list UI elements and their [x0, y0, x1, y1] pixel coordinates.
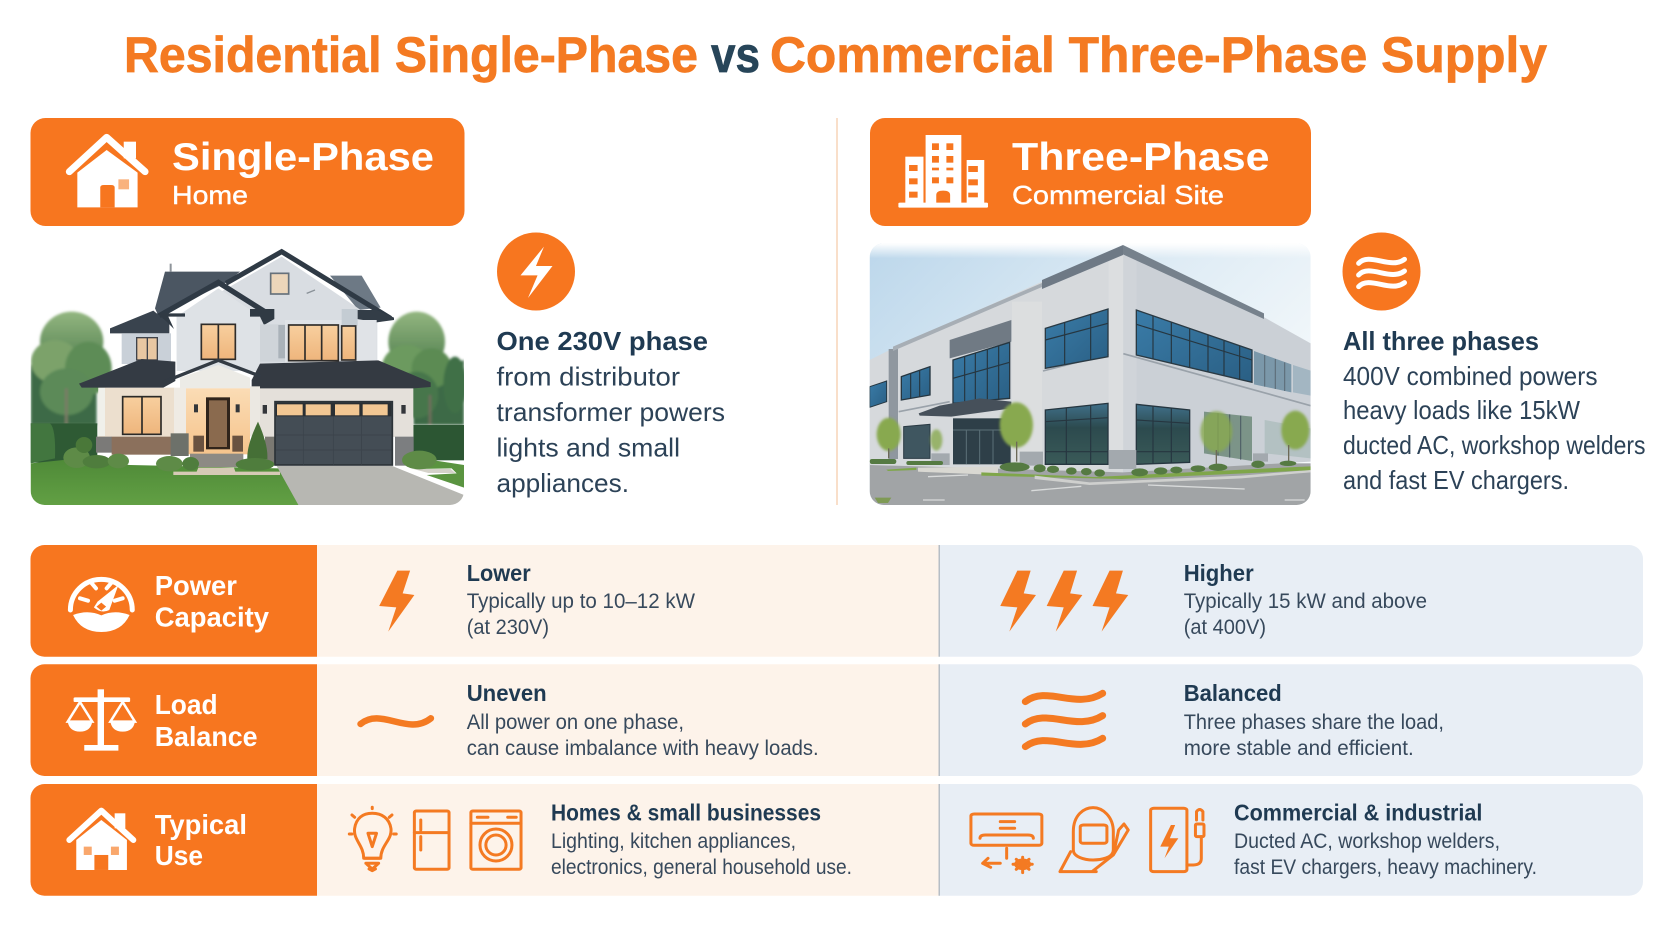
steps [190, 454, 243, 467]
icon: three waves [1025, 693, 1103, 747]
text: single-phase description [496, 326, 725, 498]
middle wall with bay [260, 324, 286, 362]
row: load balance: All power on one phase, [467, 711, 684, 734]
row: typical use: Homes & small businesses [551, 800, 821, 826]
upper windows right [1136, 310, 1252, 382]
row: typical use: Ducted AC, workshop welders, [1234, 830, 1500, 853]
upper windows left [1045, 309, 1108, 368]
text: three-phase description: 400V combined powers [1343, 361, 1598, 391]
title: Commercial Three-Phase Supply [770, 27, 1547, 83]
icon: house small [69, 811, 133, 870]
text: three-phase description: All three phases [1343, 326, 1539, 356]
row: typical use: electronics, general household use. [551, 856, 852, 879]
text: single-phase description: lights and small [496, 432, 680, 462]
row: load balance: Uneven [467, 680, 547, 706]
upper windows [201, 324, 235, 359]
side roof and wall [110, 311, 169, 333]
lower roofs [79, 359, 175, 388]
left facade [870, 247, 1123, 472]
row: typical use: fast EV chargers, heavy machinery. [1234, 856, 1537, 879]
title: vs [711, 27, 760, 83]
garage [275, 402, 392, 465]
row: power capacity: Power [155, 570, 237, 601]
text: single-phase description: appliances. [496, 468, 629, 498]
icon: office building [898, 135, 988, 208]
row: typical use: Use [155, 840, 203, 871]
background trees [31, 312, 467, 425]
icon: three bolts [1000, 571, 1128, 632]
row: load balance: Balanced [1184, 680, 1282, 706]
row: load balance [30, 664, 1643, 776]
floor bands [899, 354, 1311, 412]
row: typical use [30, 784, 1643, 896]
row: power capacity: Typically 15 kW and above [1184, 590, 1427, 613]
lower windows [1045, 403, 1108, 464]
porch [180, 365, 250, 388]
icon: lightning circle [497, 232, 575, 310]
row: power capacity: Higher [1184, 560, 1254, 586]
lower walls [98, 388, 174, 438]
top window [271, 273, 289, 294]
parapet [1123, 245, 1264, 319]
icon: single wave [361, 718, 431, 724]
asphalt [870, 463, 1311, 507]
panel: three-phase header: Commercial Site [1012, 180, 1224, 210]
text: single-phase description: from distributor [496, 362, 680, 392]
stone base [96, 437, 112, 453]
top gable trim [226, 252, 391, 318]
text: three-phase description: heavy loads like 15kW [1343, 395, 1580, 425]
back roofs [155, 272, 240, 316]
row: load balance: more stable and efficient. [1184, 737, 1414, 760]
young trees [877, 402, 1309, 452]
icon: waves circle [1342, 232, 1420, 310]
text: three-phase description [1343, 326, 1646, 495]
concrete base [931, 450, 1268, 469]
row: power capacity: (at 230V) [467, 616, 549, 639]
row: power capacity: Lower [467, 560, 531, 586]
row: power capacity: Typically up to 10–12 kW [467, 590, 695, 613]
lower window [123, 397, 161, 434]
text: single-phase description: One 230V phase [496, 326, 708, 356]
panel: three-phase header: Three-Phase [1012, 136, 1270, 179]
right facade [1123, 247, 1311, 472]
canopy [919, 398, 1011, 417]
upper wall [222, 256, 378, 364]
entrance [953, 418, 1011, 464]
row: typical use: Lighting, kitchen appliances, [551, 830, 796, 853]
driveway [277, 466, 464, 507]
title: Residential Single-Phase [124, 27, 698, 83]
panel: single-phase header [30, 118, 464, 226]
row: load balance: Load [155, 689, 218, 720]
sidewalk and green strip [918, 467, 998, 475]
panel: three-phase header [870, 118, 1311, 226]
panel: single-phase header: Single-Phase [172, 136, 434, 179]
icon: single bolt [379, 571, 414, 632]
parking marks [923, 475, 1305, 500]
row: power capacity: (at 400V) [1184, 616, 1266, 639]
low shrubs [870, 459, 1296, 477]
row: typical use: Commercial & industrial [1234, 800, 1482, 826]
row: power capacity [30, 545, 1643, 657]
row: load balance: can cause imbalance with heavy loads. [467, 737, 819, 760]
panel: single-phase header: Home [172, 180, 248, 210]
icon: scales [68, 689, 135, 751]
icons: AC, welder, charger [971, 808, 1204, 873]
row: power capacity: Capacity [155, 602, 269, 632]
icon: gauge [70, 579, 132, 632]
hedges [31, 423, 97, 463]
front gable [177, 288, 260, 371]
photo: commercial building [870, 243, 1311, 507]
text: three-phase description: and fast EV chargers. [1343, 465, 1569, 495]
row: typical use: Typical [155, 809, 247, 840]
shrubs [63, 422, 437, 471]
lawn [31, 460, 299, 506]
icons: bulb, fridge, washer [349, 807, 521, 871]
title [124, 27, 1547, 83]
text: single-phase description: transformer powers [496, 397, 725, 427]
row: load balance: Three phases share the load, [1184, 711, 1444, 734]
row: load balance: Balance [155, 721, 258, 752]
wall lamps [194, 404, 406, 414]
photo: suburban house [31, 243, 467, 507]
icon: house [69, 137, 145, 207]
